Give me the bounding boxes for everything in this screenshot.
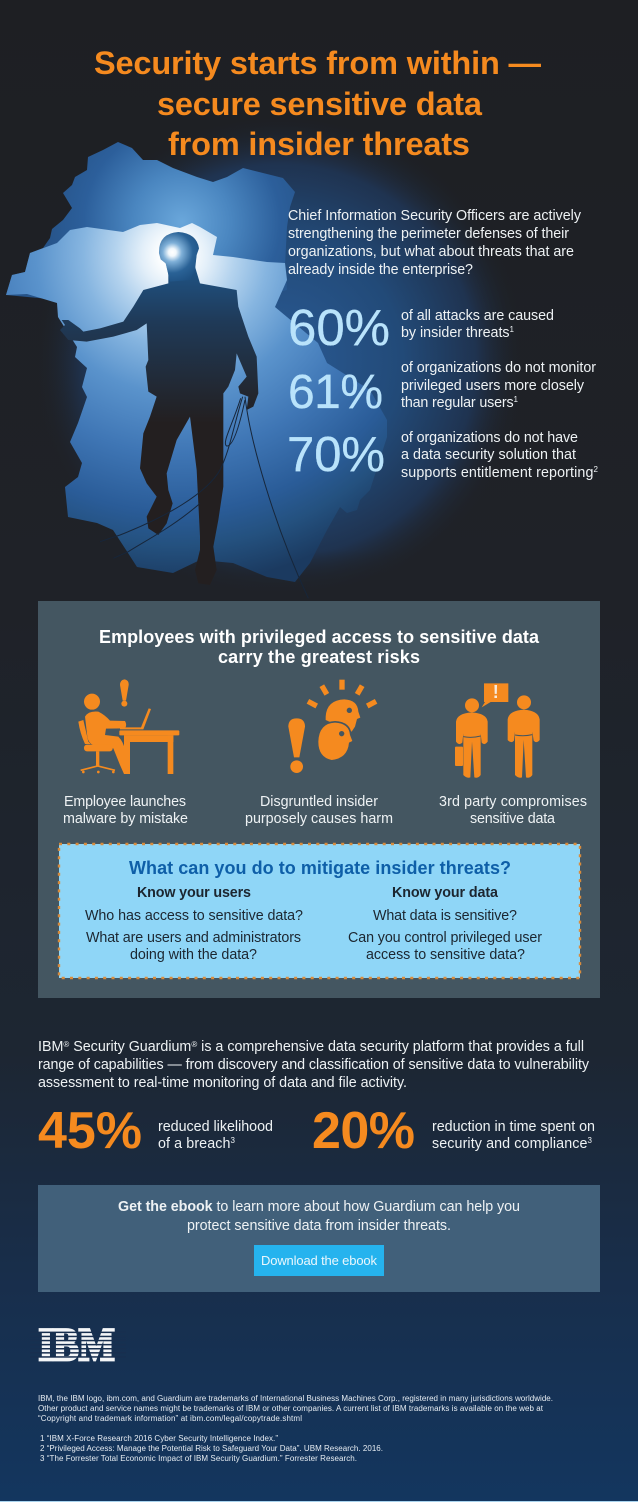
statistic: 70%: supports entitlement reporting — [401, 465, 593, 481]
statistic: 70%: of organizations do not have — [401, 430, 578, 446]
button: download: Download the ebook — [261, 1253, 378, 1268]
title — [94, 45, 542, 162]
column: know your users: Who has access to sensitive data? — [85, 908, 303, 924]
label: employee: Employee launches — [64, 794, 186, 810]
legal text: “Copyright and trademark information” at ibm.com/legal/copytrade.shtml — [38, 1414, 302, 1423]
Guardium description: is a comprehensive data security platform that provides a full — [197, 1039, 584, 1055]
column: know your data: What data is sensitive? — [373, 908, 517, 924]
intro paragraph: already inside the enterprise? — [288, 262, 473, 278]
climbing ropes — [100, 397, 308, 598]
statistic: 45%: of a breach — [158, 1136, 230, 1152]
statistic: 70%: a data security solution that — [401, 447, 576, 463]
statistic: 45%: 45% — [38, 1102, 142, 1160]
statistic: 61%: of organizations do not monitor — [401, 360, 596, 376]
column: know your data: access to sensitive data? — [366, 947, 525, 963]
statistic: 60%: 1 — [510, 325, 515, 334]
statistic: 60%: of all attacks are caused — [401, 308, 554, 324]
callout: mitigate insider threats — [59, 844, 580, 978]
Guardium description: assessment to real-time monitoring of data and file activity. — [38, 1075, 407, 1091]
statistic: 61%: than regular users — [401, 395, 514, 411]
statistic: 45%: reduced likelihood — [158, 1119, 273, 1135]
statistic: 70%: 2 — [594, 465, 599, 474]
label: third party — [439, 794, 587, 827]
exclamation mark in speech bubble: ! — [493, 682, 499, 702]
icon: employee at desk — [78, 679, 179, 774]
intro paragraph: Chief Information Security Officers are actively — [288, 208, 582, 224]
label: disgruntled insider: purposely causes harm — [245, 811, 393, 827]
intro paragraph: organizations, but what about threats that are — [288, 244, 574, 260]
legal text: IBM, the IBM logo, ibm.com, and Guardium are trademarks of International Business Machines Corp., registered in many jurisdictions worldwide. — [38, 1394, 553, 1403]
legal text — [38, 1394, 553, 1423]
statistic: 61%: 61% — [288, 366, 383, 419]
legal text: Other product and service names might be trademarks of IBM or other companies. A current list of IBM trademarks is available on the web at — [38, 1404, 544, 1413]
panel heading — [99, 627, 540, 667]
label: disgruntled insider: Disgruntled insider — [260, 794, 378, 810]
cave lit opening — [6, 223, 387, 582]
statistic: 61% — [288, 360, 596, 419]
callout heading: What can you do to mitigate insider threats? — [129, 858, 511, 878]
ebook text: protect sensitive data from insider threats. — [187, 1218, 451, 1234]
icon: two people with speech bubble — [455, 683, 540, 778]
illustration: climber in cave — [0, 115, 560, 605]
panel: privileged access risks — [38, 601, 600, 998]
column: know your users: Know your users — [137, 885, 251, 901]
statistic: 60%: by insider threats — [401, 325, 510, 341]
statistic: 20%: reduction in time spent on — [432, 1119, 595, 1135]
statistic: 20% — [312, 1102, 595, 1160]
column: know your users: What are users and administrators — [86, 930, 301, 946]
Guardium description: ® — [191, 1040, 197, 1049]
label: third party: sensitive data — [470, 811, 555, 827]
intro paragraph: strengthening the perimeter defenses of their — [288, 226, 569, 242]
icon: disgruntled insider — [288, 680, 377, 773]
ebook text — [118, 1199, 520, 1234]
label: employee: malware by mistake — [63, 811, 188, 827]
statistic: 45%: 3 — [231, 1136, 236, 1145]
Guardium description — [38, 1039, 590, 1091]
statistic: 61%: privileged users more closely — [401, 378, 585, 394]
title: from insider threats — [168, 126, 470, 162]
Guardium description: range of capabilities — from discovery and classification of sensitive data to vulnerability — [38, 1057, 590, 1073]
footnotes — [40, 1434, 383, 1463]
column: know your data: Can you control privileged user — [348, 930, 542, 946]
column: know your users — [85, 885, 303, 963]
Guardium description: ® — [63, 1040, 69, 1049]
intro paragraph — [288, 208, 582, 278]
label: disgruntled insider — [245, 794, 393, 827]
IBM logo: IBM — [38, 1319, 115, 1371]
Guardium description: IBM — [38, 1039, 63, 1055]
statistic: 70%: 70% — [287, 428, 385, 482]
statistic: 70% — [287, 428, 599, 482]
footnotes: 2 “Privileged Access: Manage the Potential Risk to Safeguard Your Data”. UBM Research. 2016. — [40, 1444, 383, 1453]
ebook text: Get the ebook to learn more about how Guardium can help you — [118, 1199, 520, 1215]
label: third party: 3rd party compromises — [439, 794, 587, 810]
footnotes: 3 “The Forrester Total Economic Impact of IBM Security Guardium.” Forrester Research. — [40, 1454, 357, 1463]
statistic: 60% — [288, 299, 554, 356]
panel heading: Employees with privileged access to sensitive data — [99, 627, 540, 647]
climber silhouette — [60, 253, 258, 585]
button: download — [254, 1245, 384, 1276]
title: secure sensitive data — [157, 86, 483, 122]
Guardium description: Security Guardium — [69, 1039, 191, 1055]
statistic: 60%: 60% — [288, 299, 390, 356]
panel heading: carry the greatest risks — [218, 647, 420, 667]
statistic: 20%: security and compliance — [432, 1136, 587, 1152]
footnotes: 1 “IBM X-Force Research 2016 Cyber Security Intelligence Index.” — [40, 1434, 278, 1443]
statistic: 61%: 1 — [514, 395, 519, 404]
title: Security starts from within — — [94, 45, 542, 81]
helmet with headlamp — [159, 232, 199, 282]
label: employee — [63, 794, 188, 827]
panel: get the ebook — [38, 1185, 600, 1292]
statistic: 45% — [38, 1102, 273, 1160]
statistic: 20%: 3 — [588, 1136, 593, 1145]
cave upper rock band — [6, 142, 295, 300]
column: know your data — [348, 885, 542, 963]
column: know your users: doing with the data? — [130, 947, 257, 963]
column: know your data: Know your data — [392, 885, 499, 901]
statistic: 20%: 20% — [312, 1102, 415, 1160]
